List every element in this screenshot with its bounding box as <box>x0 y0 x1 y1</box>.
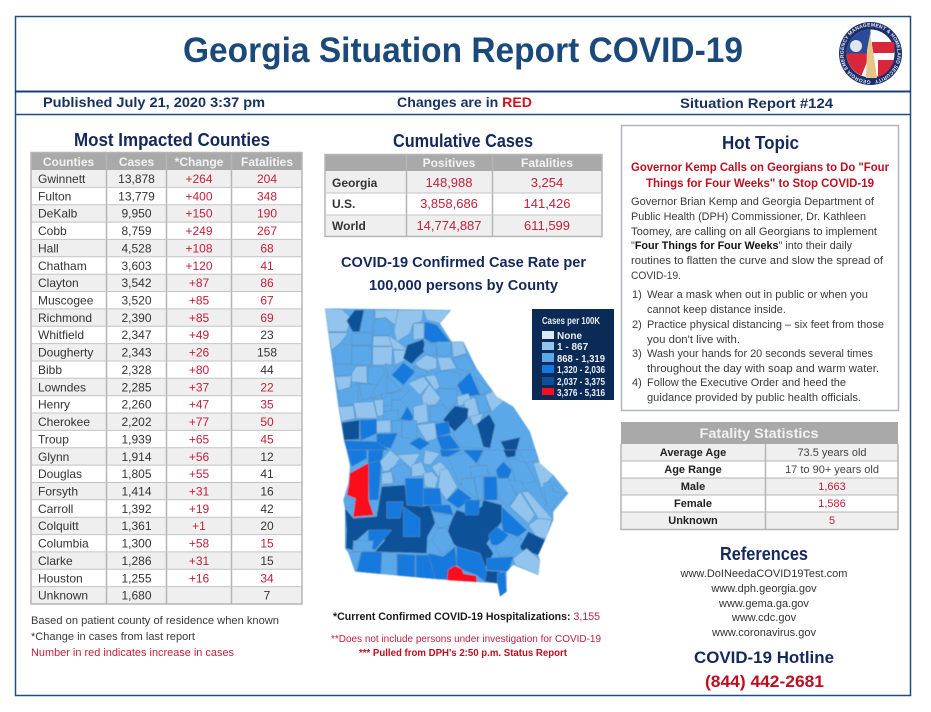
table: most impacted counties: Muscogee <box>38 294 94 308</box>
changes note: Changes are in RED <box>397 94 532 110</box>
table: most impacted counties: 1,680 <box>121 589 152 603</box>
table: most impacted counties: +65 <box>189 432 210 446</box>
hot topic body: "Four Things for Four Weeks" into their daily <box>631 240 852 252</box>
table: most impacted counties: Dougherty <box>38 346 93 360</box>
four things list: 1) <box>632 289 642 301</box>
table: most impacted counties: 2,347 <box>121 328 152 342</box>
map legend: 1 - 867 <box>557 342 589 353</box>
table: most impacted counties: +56 <box>189 450 210 464</box>
table: most impacted counties: Fatalities <box>241 155 293 169</box>
table: most impacted counties: *Change <box>175 155 224 169</box>
table: cumulative cases <box>325 154 602 237</box>
table: most impacted counties: 1,805 <box>121 467 152 481</box>
table: most impacted counties: 2,202 <box>121 415 152 429</box>
table: most impacted counties: +37 <box>189 380 210 394</box>
hospitalizations callout: *Current Confirmed COVID-19 Hospitalizations: 3,155 <box>333 611 600 623</box>
table: fatality statistics: 5 <box>829 515 835 527</box>
table: cumulative cases: 3,858,686 <box>420 196 478 211</box>
table: most impacted counties: 44 <box>260 363 274 377</box>
table: fatality statistics: Age Range <box>664 464 722 476</box>
table: cumulative cases: 14,774,887 <box>416 218 482 233</box>
table: most impacted counties: Colquitt <box>38 519 79 533</box>
table: fatality statistics: Fatality Statistics <box>700 425 819 441</box>
table: most impacted counties: 1,414 <box>121 484 152 498</box>
table: fatality statistics: Female <box>674 498 712 510</box>
table: most impacted counties: Forsyth <box>38 484 78 498</box>
table: most impacted counties: +85 <box>189 294 210 308</box>
table: most impacted counties: 348 <box>257 189 277 203</box>
four things list: you don't live with. <box>647 334 740 346</box>
map legend: 868 - 1,319 <box>557 354 605 365</box>
table: most impacted counties: Cases <box>119 155 154 169</box>
hot topic subheading: Things for Four Weeks" to Stop COVID-19 <box>646 178 874 190</box>
table: most impacted counties: 15 <box>260 554 274 568</box>
table: most impacted counties: +16 <box>189 571 210 585</box>
hot topic heading: Hot Topic <box>722 133 799 153</box>
table: cumulative cases: 141,426 <box>524 196 570 211</box>
table: fatality statistics: 1,663 <box>818 481 846 493</box>
four things list: Wear a mask when out in public or when you <box>647 289 868 301</box>
table: fatality statistics <box>621 422 898 530</box>
table: most impacted counties: +249 <box>185 224 213 238</box>
table: most impacted counties: Hall <box>38 241 59 255</box>
heading: case rate map: 100,000 persons by County <box>369 278 558 294</box>
table: fatality statistics: 17 to 90+ years old <box>785 464 879 476</box>
hot topic body: routines to flatten the curve and slow the spread of <box>631 255 884 267</box>
table: most impacted counties: Clarke <box>38 554 73 568</box>
table footnotes <box>31 615 279 659</box>
table: most impacted counties: +47 <box>189 398 210 412</box>
table: most impacted counties: 15 <box>260 537 274 551</box>
table: most impacted counties: 204 <box>257 172 277 186</box>
table: most impacted counties: 8,759 <box>121 224 152 238</box>
table: most impacted counties: +87 <box>189 276 210 290</box>
table: most impacted counties: 190 <box>257 207 277 221</box>
map legend: 3,376 - 5,316 <box>557 388 605 399</box>
table: most impacted counties: 267 <box>257 224 277 238</box>
table: most impacted counties: +264 <box>185 172 213 186</box>
four things list: 2) <box>632 319 642 331</box>
table: most impacted counties: Bibb <box>38 363 62 377</box>
map legend <box>532 309 614 400</box>
reference links: www.dph.georgia.gov <box>710 583 817 595</box>
table: fatality statistics: Average Age <box>660 447 726 459</box>
table: most impacted counties: 50 <box>260 415 274 429</box>
table: most impacted counties: 20 <box>260 519 274 533</box>
table: most impacted counties: 1,914 <box>121 450 152 464</box>
heading: references: References <box>720 544 808 564</box>
map legend: Cases per 100K <box>542 316 601 327</box>
table: most impacted counties: 2,390 <box>121 311 152 325</box>
four things list: cannot keep distance inside. <box>647 304 786 316</box>
table: most impacted counties: 22 <box>260 380 274 394</box>
table: most impacted counties: Whitfield <box>38 328 84 342</box>
table: most impacted counties: 35 <box>260 398 274 412</box>
table: most impacted counties: Unknown <box>38 589 88 603</box>
table: most impacted counties: 1,255 <box>121 571 152 585</box>
table: most impacted counties <box>31 152 302 604</box>
table: most impacted counties: Houston <box>38 571 83 585</box>
four things list: 4) <box>632 377 642 389</box>
hot topic body: Governor Brian Kemp and Georgia Department of <box>631 196 875 208</box>
table: most impacted counties: Douglas <box>38 467 82 481</box>
reference links <box>680 568 847 639</box>
heading: case rate map <box>341 255 586 294</box>
table: most impacted counties: +108 <box>185 241 213 255</box>
table: most impacted counties: +55 <box>189 467 210 481</box>
table: most impacted counties: Glynn <box>38 450 69 464</box>
table: most impacted counties: DeKalb <box>38 207 78 221</box>
table: most impacted counties: 41 <box>260 259 274 273</box>
table: most impacted counties: +400 <box>185 189 213 203</box>
table: most impacted counties: 16 <box>260 484 274 498</box>
table: most impacted counties: Fulton <box>38 189 71 203</box>
hotline heading: COVID-19 Hotline <box>694 648 834 667</box>
reference links: www.coronavirus.gov <box>711 627 816 639</box>
four things list: guidance provided by public health officials. <box>647 392 861 404</box>
four things list: Practice physical distancing – six feet from those <box>647 319 884 331</box>
table: cumulative cases: Positives <box>423 156 476 170</box>
four things list: 3) <box>632 348 642 360</box>
four things list <box>632 289 884 404</box>
table: most impacted counties: +120 <box>185 259 213 273</box>
table: most impacted counties: 4,528 <box>121 241 152 255</box>
table: cumulative cases: 3,254 <box>531 175 563 190</box>
hot topic body <box>631 196 884 282</box>
table: fatality statistics: 1,586 <box>818 498 846 510</box>
choropleth map: Georgia counties <box>324 308 569 597</box>
table: most impacted counties: +31 <box>189 484 210 498</box>
icon: Georgia emergency management seal: GEORGIA EMERGENCY MANAGEMENT & HOMELAND SECURITY <box>840 23 901 84</box>
table: most impacted counties: 2,285 <box>121 380 152 394</box>
hot topic subheading <box>631 162 890 190</box>
hot topic body: COVID-19. <box>631 270 681 282</box>
map footnotes: *** Pulled from DPH's 2:50 p.m. Status Report <box>359 648 568 659</box>
table: most impacted counties: 1,939 <box>121 432 152 446</box>
heading: case rate map: COVID-19 Confirmed Case Rate per <box>341 255 586 271</box>
table: most impacted counties: 67 <box>260 294 274 308</box>
table: most impacted counties: 3,542 <box>121 276 152 290</box>
table: most impacted counties: 7 <box>264 589 271 603</box>
four things list: throughout the day with soap and warm water. <box>647 363 879 375</box>
hotline number: (844) 442-2681 <box>705 672 824 691</box>
table: most impacted counties: +77 <box>189 415 210 429</box>
hot topic body: Public Health (DPH) Commissioner, Dr. Kathleen <box>631 211 866 223</box>
table: most impacted counties: Richmond <box>38 311 92 325</box>
table: most impacted counties: Lowndes <box>38 380 86 394</box>
table footnotes: Based on patient county of residence when known <box>31 615 279 627</box>
table: most impacted counties: 69 <box>260 311 274 325</box>
hot topic subheading: Governor Kemp Calls on Georgians to Do "Four <box>631 162 890 174</box>
table: most impacted counties: +80 <box>189 363 210 377</box>
map legend: 1,320 - 2,036 <box>557 365 605 376</box>
table: most impacted counties: 2,343 <box>121 346 152 360</box>
map legend: 2,037 - 3,375 <box>557 377 605 388</box>
map legend: None <box>557 331 582 342</box>
table: most impacted counties: Cherokee <box>38 415 90 429</box>
table: most impacted counties: Cobb <box>38 224 67 238</box>
table: cumulative cases: Fatalities <box>521 156 573 170</box>
table: most impacted counties: Carroll <box>38 502 73 516</box>
table: cumulative cases: World <box>332 219 366 233</box>
table: most impacted counties: Columbia <box>38 537 89 551</box>
hot topic body: Toomey, are calling on all Georgians to implement <box>631 226 877 238</box>
title: Georgia Situation Report COVID-19 <box>183 31 743 70</box>
table: most impacted counties: 2,328 <box>121 363 152 377</box>
four things list: Follow the Executive Order and heed the <box>647 377 846 389</box>
report number: Situation Report #124 <box>680 95 833 111</box>
table: most impacted counties: +49 <box>189 328 210 342</box>
table: most impacted counties: +26 <box>189 346 210 360</box>
table: most impacted counties: 12 <box>260 450 274 464</box>
map footnotes <box>331 634 601 659</box>
heading: cumulative cases: Cumulative Cases <box>393 131 533 151</box>
table: most impacted counties: +150 <box>185 207 213 221</box>
table footnotes: Number in red indicates increase in cases <box>31 647 234 659</box>
table: most impacted counties: 3,603 <box>121 259 152 273</box>
table: most impacted counties: 1,392 <box>121 502 152 516</box>
table: cumulative cases: 148,988 <box>426 175 472 190</box>
table: most impacted counties: Clayton <box>38 276 79 290</box>
panel: hot topic <box>622 126 898 410</box>
table: most impacted counties: Henry <box>38 398 70 412</box>
map footnotes: **Does not include persons under investigation for COVID-19 <box>331 634 601 645</box>
table: fatality statistics: Male <box>681 481 705 493</box>
table: most impacted counties: 1,286 <box>121 554 152 568</box>
table: most impacted counties: 68 <box>260 241 274 255</box>
table: most impacted counties: 1,361 <box>121 519 152 533</box>
report date: Published July 21, 2020 3:37 pm <box>43 94 265 110</box>
table: most impacted counties: +58 <box>189 537 210 551</box>
table: most impacted counties: 2,260 <box>121 398 152 412</box>
table: most impacted counties: Counties <box>43 155 94 169</box>
table: most impacted counties: +31 <box>189 554 210 568</box>
table: cumulative cases: Georgia <box>332 176 378 190</box>
reference links: www.cdc.gov <box>731 612 797 624</box>
table: most impacted counties: +85 <box>189 311 210 325</box>
table: most impacted counties: 9,950 <box>121 207 152 221</box>
table: most impacted counties: 1,300 <box>121 537 152 551</box>
table: most impacted counties: 42 <box>260 502 274 516</box>
table: most impacted counties: 158 <box>257 346 277 360</box>
table: cumulative cases: 611,599 <box>524 218 570 233</box>
table: most impacted counties: 34 <box>260 571 274 585</box>
table: most impacted counties: Gwinnett <box>38 172 86 186</box>
table: most impacted counties: +1 <box>192 519 206 533</box>
heading: most impacted counties: Most Impacted Counties <box>74 130 270 150</box>
table: fatality statistics: 73.5 years old <box>797 447 867 459</box>
table: most impacted counties: 3,520 <box>121 294 152 308</box>
table: most impacted counties: 45 <box>260 432 274 446</box>
table: most impacted counties: Chatham <box>38 259 87 273</box>
table: most impacted counties: 13,779 <box>118 189 155 203</box>
table: most impacted counties: Troup <box>38 432 69 446</box>
table: fatality statistics: Unknown <box>668 515 718 527</box>
table: most impacted counties: 86 <box>260 276 274 290</box>
reference links: www.DoINeedaCOVID19Test.com <box>680 568 847 580</box>
table: most impacted counties: 41 <box>260 467 274 481</box>
table footnotes: *Change in cases from last report <box>31 631 195 643</box>
reference links: www.gema.ga.gov <box>718 598 809 610</box>
table: most impacted counties: 23 <box>260 328 274 342</box>
four things list: Wash your hands for 20 seconds several times <box>647 348 873 360</box>
table: cumulative cases: U.S. <box>332 197 355 211</box>
table: most impacted counties: +19 <box>189 502 210 516</box>
table: most impacted counties: 13,878 <box>118 172 155 186</box>
